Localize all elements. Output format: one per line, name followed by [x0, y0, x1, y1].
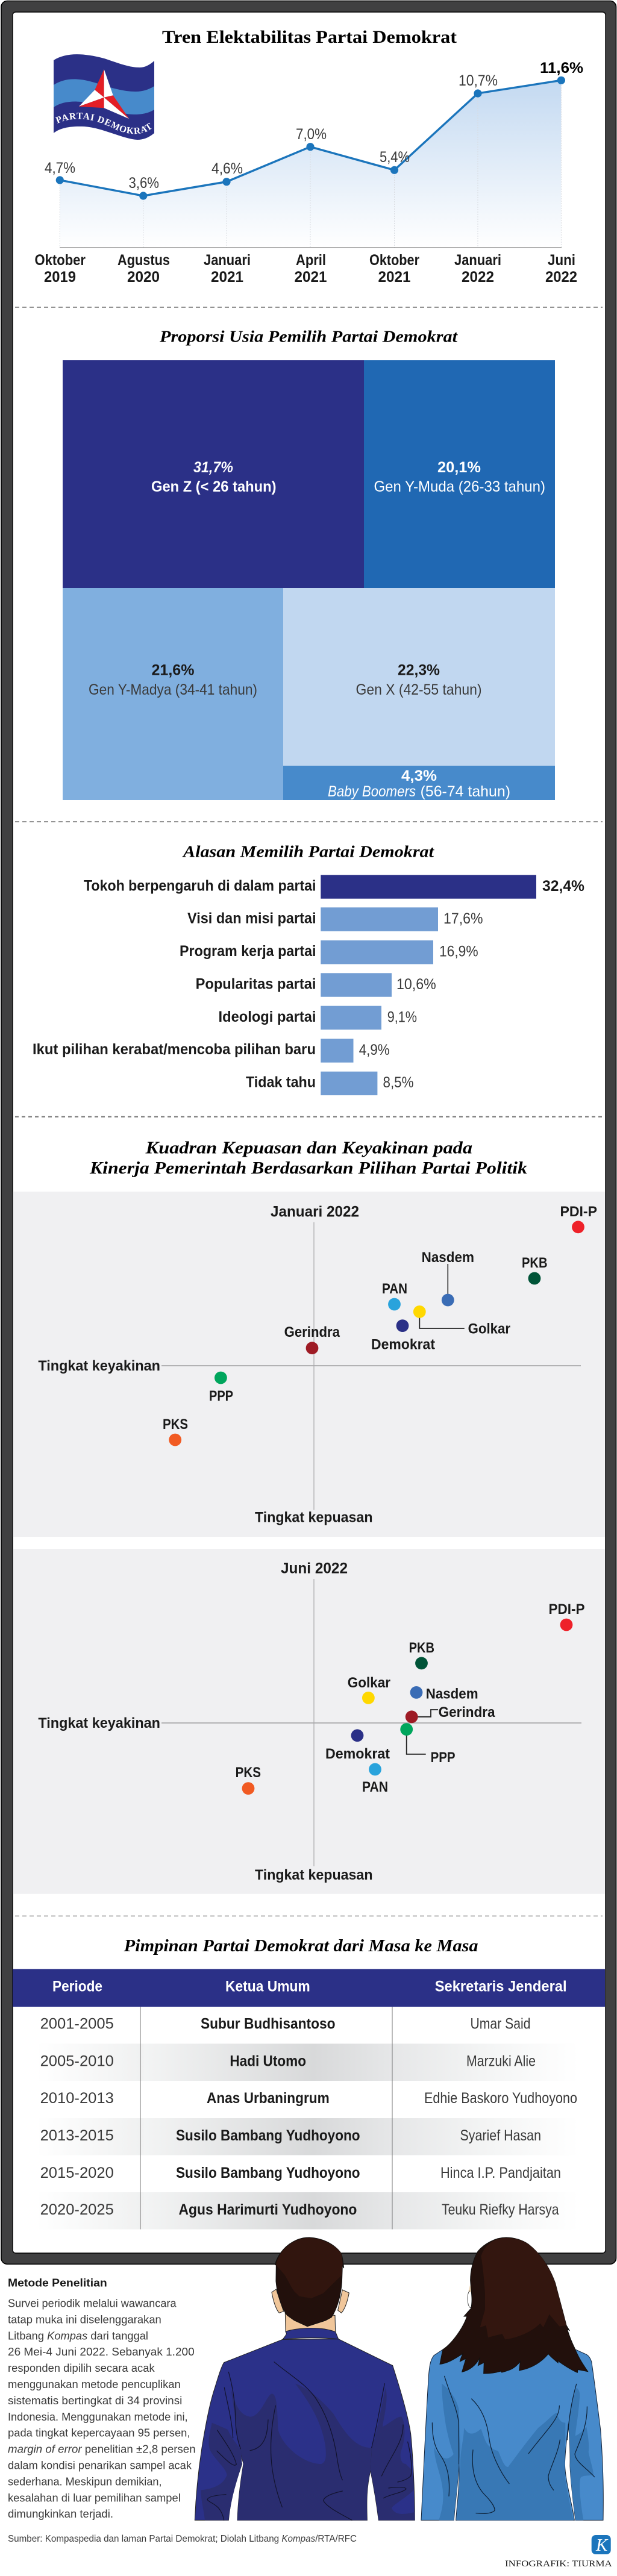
point: PKB: PKB	[409, 1640, 434, 1656]
icon: Partai Demokrat flag logo	[54, 54, 154, 140]
row: 2001-2005	[40, 2016, 531, 2033]
panel: satisfaction quadrants	[13, 1139, 605, 1894]
line chart: electability 2019-2022: 2022	[462, 269, 494, 286]
line chart: electability 2019-2022: 2020	[127, 269, 160, 286]
text block: research method: Litbang Kompas dari tanggal	[8, 2329, 148, 2342]
point: Nasdem: Nasdem	[426, 1686, 478, 1702]
point: Gerindra	[406, 1704, 495, 1723]
line chart: electability 2019-2022: 11,6%	[540, 60, 583, 77]
segment: Gen X: Gen X (42-55 tahun)	[355, 681, 482, 698]
line chart: electability 2019-2022: 2021	[211, 269, 243, 286]
point: Golkar	[348, 1675, 390, 1704]
segment: Gen Z	[63, 360, 364, 588]
row: 2005-2010: Marzuki Alie	[466, 2053, 536, 2070]
text block: research method: Indonesia. Menggunakan metode ini,	[8, 2410, 188, 2423]
bar: popularity: Popularitas partai	[196, 976, 316, 993]
point: PPP	[209, 1372, 233, 1404]
table header: Sekretaris Jenderal	[435, 1978, 567, 1995]
point: PKB	[409, 1640, 434, 1669]
point: PPP	[400, 1723, 456, 1766]
bar: popularity: 10,6%	[396, 976, 436, 993]
row: 2001-2005: 2001-2005	[40, 2016, 114, 2033]
segment: Baby Boomers: 4,3%	[401, 767, 437, 784]
table header	[13, 1969, 605, 2007]
line chart: electability 2019-2022: Agustus	[117, 252, 170, 269]
row: 2005-2010: 2005-2010	[40, 2053, 114, 2070]
point: Gerindra	[284, 1324, 340, 1354]
bar: vision and mission: 17,6%	[443, 910, 483, 927]
row: 2010-2013	[40, 2090, 577, 2107]
point: PAN	[362, 1763, 388, 1795]
text block: research method: dimungkinkan terjadi.	[8, 2507, 113, 2520]
chart: quadrant June 2022	[13, 1549, 605, 1894]
bar: influential figure: Tokoh berpengaruh di dalam partai	[84, 877, 316, 894]
segment: Gen X: 22,3%	[398, 661, 440, 678]
point: PKB	[522, 1255, 547, 1284]
segment: Gen Z: Gen Z (< 26 tahun)	[151, 478, 276, 495]
row: 2013-2015: Syarief Hasan	[460, 2127, 541, 2144]
text block: research method: tatap muka ini diselenggarakan	[8, 2313, 161, 2325]
panel: reasons for choosing	[33, 843, 584, 1095]
row: 2020-2025: Agus Harimurti Yudhoyono	[178, 2201, 357, 2218]
bar: following relatives: 4,9%	[359, 1042, 390, 1058]
row: 2010-2013: Edhie Baskoro Yudhoyono	[424, 2090, 577, 2107]
line chart: electability 2019-2022: 4,7%	[45, 160, 75, 177]
table header: Ketua Umum	[225, 1978, 310, 1995]
bar: do not know: 8,5%	[383, 1074, 413, 1091]
icon: Partai Demokrat flag logo: PARTAI DEMOKRAT	[55, 113, 152, 134]
segment: Baby Boomers: (56-74 tahun)	[421, 783, 510, 800]
text block: research method: 26 Mei-4 Juni 2022. Sebanyak 1.200	[8, 2345, 195, 2358]
segment: Gen Y-Madya	[63, 588, 283, 800]
panel: election trend	[35, 27, 583, 286]
point: Gerindra: Gerindra	[284, 1324, 340, 1340]
heading: quadrants: Kinerja Pemerintah Berdasarkan Pilihan Partai Politik	[89, 1159, 527, 1178]
bar: ideology: Ideologi partai	[218, 1008, 316, 1025]
chart: quadrant June 2022: Juni 2022	[281, 1560, 348, 1577]
bar: do not know	[246, 1072, 413, 1095]
row: 2013-2015	[40, 2127, 541, 2144]
line chart: electability 2019-2022: Januari	[454, 252, 501, 269]
line chart: electability 2019-2022: 10,7%	[459, 72, 498, 89]
source note: Sumber: Kompaspedia dan laman Partai Demokrat; Diolah Litbang Kompas/RTA/RFC	[8, 2534, 357, 2544]
point: Golkar	[413, 1305, 510, 1337]
row: 2005-2010	[40, 2053, 536, 2070]
bar: vision and mission: Visi dan misi partai	[187, 910, 316, 927]
text block: research method: margin of error penelitian ±2,8 persen	[8, 2443, 196, 2456]
bar: work programme: Program kerja partai	[180, 943, 316, 960]
heading: leaders: Pimpinan Partai Demokrat dari Masa ke Masa	[124, 1937, 478, 1955]
chart: quadrant January 2022	[13, 1192, 605, 1537]
illustration: man from behind in dark blue shirt	[195, 2237, 415, 2520]
bar: do not know: Tidak tahu	[246, 1074, 316, 1090]
panel: party leaders	[13, 1937, 605, 2229]
line chart: electability 2019-2022: Januari	[204, 252, 251, 269]
point: Demokrat	[371, 1319, 435, 1353]
text block: research method	[8, 2277, 196, 2520]
line chart: electability 2019-2022: April	[296, 252, 326, 269]
icon: Kompas K logo: K	[595, 2536, 609, 2555]
point: PKB: PKB	[522, 1255, 547, 1271]
point: Demokrat: Demokrat	[371, 1336, 435, 1353]
point: PKS: PKS	[236, 1765, 261, 1781]
segment: Gen X	[283, 588, 555, 766]
point: PAN: PAN	[382, 1281, 407, 1297]
chart: quadrant January 2022: Tingkat kepuasan	[255, 1510, 372, 1525]
text block: research method: responden dipilih secara acak	[8, 2362, 155, 2374]
point: Golkar: Golkar	[348, 1675, 390, 1691]
line chart: electability 2019-2022: 7,0%	[296, 126, 327, 143]
row: 2013-2015: Susilo Bambang Yudhoyono	[176, 2127, 360, 2144]
text block: research method: kesalahan di luar pemilihan sampel	[8, 2491, 181, 2504]
text block: research method: sederhana. Meskipun demikian,	[8, 2475, 161, 2487]
text block: research method: menggunakan metode pencuplikan	[8, 2378, 181, 2390]
row: 2001-2005: Umar Said	[470, 2016, 530, 2033]
row: 2020-2025: Teuku Riefky Harsya	[442, 2201, 559, 2218]
heading: trend: Tren Elektabilitas Partai Demokrat	[162, 27, 457, 47]
illustration: woman from behind in light blue shirt	[421, 2237, 603, 2520]
bar: popularity	[196, 973, 436, 997]
bar: ideology: 9,1%	[387, 1008, 417, 1025]
point: PKS	[163, 1416, 188, 1446]
segment: Gen Z: 31,7%	[193, 459, 233, 476]
point: Nasdem	[422, 1249, 474, 1306]
bar: ideology	[218, 1006, 417, 1030]
bar: influential figure: 32,4%	[542, 878, 584, 895]
point: PPP: PPP	[431, 1749, 456, 1766]
bar: following relatives	[33, 1039, 390, 1063]
text block: research method: Metode Penelitian	[8, 2277, 107, 2289]
row: 2015-2020: Hinca I.P. Pandjaitan	[440, 2165, 561, 2181]
bar: following relatives: Ikut pilihan kerabat/mencoba pilihan baru	[33, 1041, 316, 1058]
segment: Gen Y-Madya: 21,6%	[152, 661, 194, 678]
point: PAN	[382, 1281, 407, 1310]
heading: quadrants	[89, 1139, 527, 1178]
point: PDI-P: PDI-P	[548, 1601, 584, 1618]
point: Nasdem: Nasdem	[422, 1249, 474, 1266]
point: Gerindra: Gerindra	[439, 1704, 495, 1721]
row: 2013-2015: 2013-2015	[40, 2127, 114, 2144]
bar chart: reasons	[33, 875, 584, 1095]
row: 2015-2020: 2015-2020	[40, 2165, 114, 2181]
point: PDI-P	[560, 1204, 597, 1233]
point: PPP: PPP	[209, 1388, 233, 1404]
line chart: electability 2019-2022: 2022	[545, 269, 577, 286]
bar: work programme: 16,9%	[439, 943, 478, 960]
treemap: age groups	[63, 360, 555, 800]
point: Demokrat: Demokrat	[325, 1746, 390, 1762]
text block: research method: dalam kondisi penarikan sampel acak	[8, 2459, 192, 2471]
point: PDI-P: PDI-P	[560, 1204, 597, 1220]
line chart: electability 2019-2022: 2019	[44, 269, 76, 286]
row: 2010-2013: Anas Urbaningrum	[207, 2090, 330, 2107]
chart: quadrant January 2022: Tingkat keyakinan	[38, 1358, 160, 1374]
line chart: electability 2019-2022: 2021	[294, 269, 327, 286]
row: 2015-2020	[40, 2165, 561, 2181]
credit: INFOGRAFIK: TIURMA	[505, 2559, 612, 2569]
segment: Gen Y-Muda: 20,1%	[437, 459, 481, 476]
table header: Periode	[52, 1978, 102, 1995]
line chart: electability 2019-2022: 3,6%	[129, 175, 159, 192]
table: leaders by period	[13, 1969, 605, 2229]
point: PDI-P	[548, 1601, 584, 1631]
segment: Baby Boomers: Baby Boomers	[328, 783, 416, 800]
icon: Kompas K logo	[592, 2535, 611, 2555]
text block: research method: Survei periodik melalui wawancara	[8, 2296, 177, 2310]
panel: voter age proportions	[63, 328, 555, 800]
line chart: electability 2019-2022: Oktober	[369, 252, 419, 269]
point: PKS	[236, 1765, 261, 1795]
chart: quadrant January 2022: Januari 2022	[271, 1203, 359, 1220]
text block: research method: sistematis bertingkat di 34 provinsi	[8, 2394, 182, 2407]
point: PAN: PAN	[362, 1779, 388, 1795]
point: PKS: PKS	[163, 1416, 188, 1433]
bar: vision and mission	[187, 907, 483, 931]
row: 2020-2025: 2020-2025	[40, 2201, 114, 2218]
bar: work programme	[180, 940, 478, 964]
heading: quadrants: Kuadran Kepuasan dan Keyakinan pada	[145, 1139, 472, 1158]
point: Demokrat	[325, 1729, 390, 1762]
segment: Baby Boomers	[283, 766, 555, 800]
line chart: electability 2019-2022: 5,4%	[380, 149, 410, 166]
row: 2015-2020: Susilo Bambang Yudhoyono	[176, 2165, 360, 2181]
heading: age proportions: Proporsi Usia Pemilih Partai Demokrat	[159, 328, 459, 346]
segment: Gen Y-Muda	[364, 360, 555, 588]
line chart: electability 2019-2022: 4,6%	[211, 160, 243, 177]
line chart: electability 2019-2022	[35, 60, 583, 286]
row: 2010-2013: 2010-2013	[40, 2090, 114, 2107]
chart: quadrant June 2022: Tingkat kepuasan	[255, 1867, 372, 1883]
line chart: electability 2019-2022: Juni	[548, 252, 575, 269]
line chart: electability 2019-2022: 2021	[378, 269, 411, 286]
row: 2001-2005: Subur Budhisantoso	[201, 2016, 335, 2033]
chart: quadrant June 2022: Tingkat keyakinan	[38, 1715, 160, 1731]
row: 2005-2010: Hadi Utomo	[230, 2053, 306, 2070]
bar: influential figure	[84, 875, 584, 899]
segment: Gen Y-Muda: Gen Y-Muda (26-33 tahun)	[374, 478, 545, 495]
row: 2020-2025	[40, 2201, 559, 2218]
text block: research method: pada tingkat kepercayaan 95 persen,	[8, 2427, 190, 2439]
line chart: electability 2019-2022: Oktober	[35, 252, 86, 269]
point: Golkar: Golkar	[468, 1321, 510, 1337]
segment: Gen Y-Madya: Gen Y-Madya (34-41 tahun)	[89, 681, 257, 698]
heading: reasons: Alasan Memilih Partai Demokrat	[182, 843, 435, 861]
